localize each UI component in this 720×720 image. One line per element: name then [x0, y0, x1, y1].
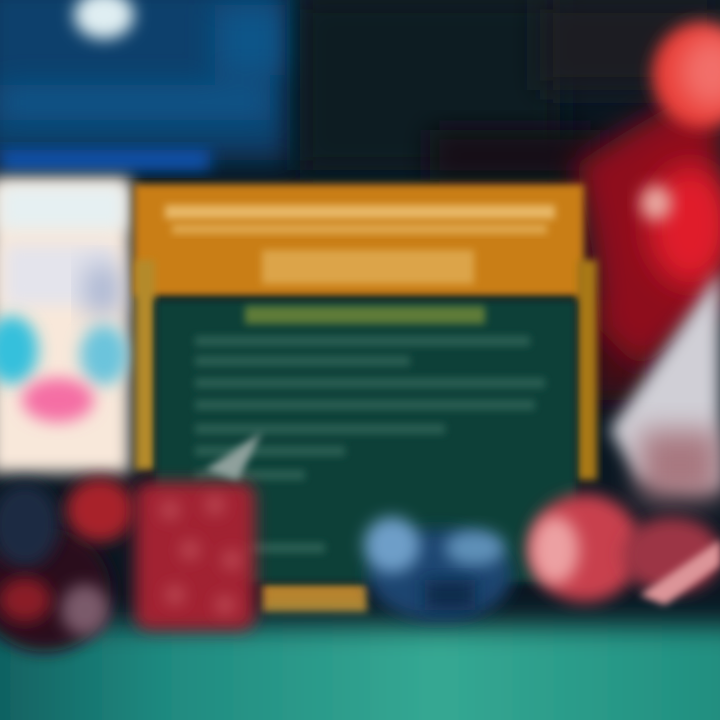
felt table [0, 625, 720, 720]
left poster [0, 178, 130, 473]
right white cards [610, 270, 720, 500]
chalkboard heading [245, 306, 485, 324]
chalkboard text lines [195, 336, 545, 553]
orange notice board [134, 184, 597, 612]
green chalkboard panel [156, 300, 576, 582]
left poker chips [0, 432, 262, 652]
right red poker chips [529, 494, 720, 605]
board heading text [165, 205, 555, 284]
blue poker chips [364, 517, 512, 621]
red figure top right [575, 23, 720, 370]
